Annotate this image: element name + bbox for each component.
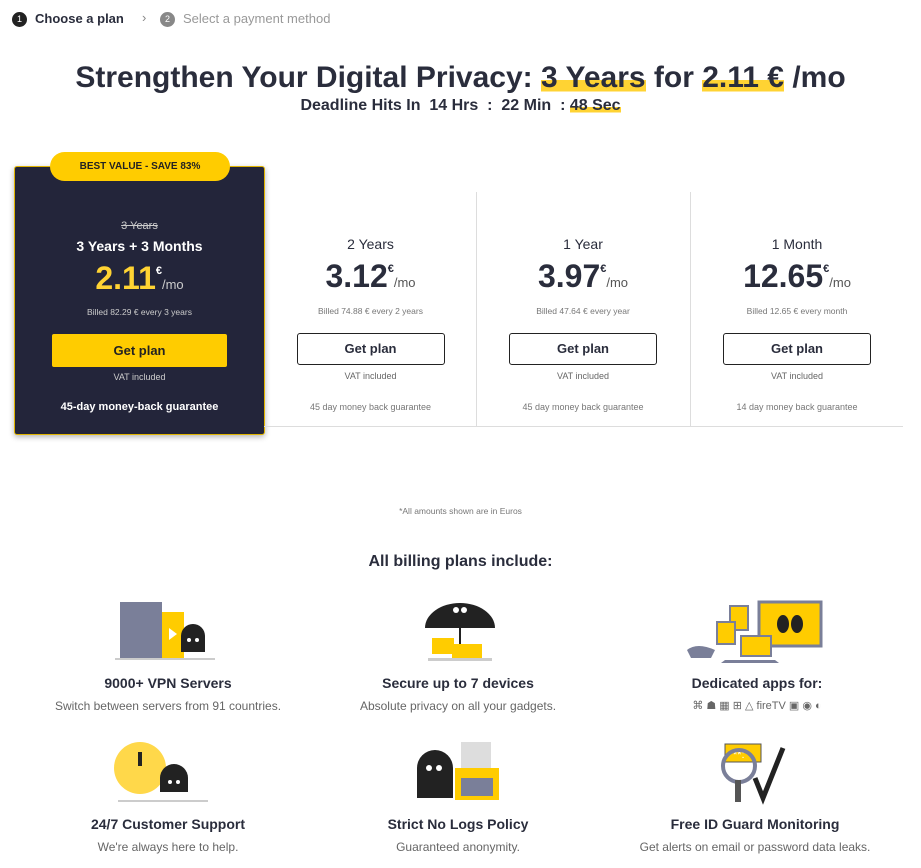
feature: no logs [388, 816, 528, 854]
icon: umbrella devices [425, 603, 495, 661]
plan: 1 month: Get plan [771, 341, 823, 356]
feature: support [91, 816, 245, 854]
badge: BEST VALUE - SAVE 83% [80, 161, 200, 172]
plan: 1 year: 45 day money back guarantee [522, 402, 644, 412]
breadcrumb: Choose a plan [35, 11, 124, 26]
badge [50, 152, 230, 181]
plan: 2 years: Get plan [344, 341, 396, 356]
feature: servers: 9000+ VPN Servers [104, 675, 232, 691]
breadcrumb: › [142, 10, 146, 25]
breadcrumb: 2 [165, 14, 170, 24]
plan: 1 year: 3.97€ /mo [538, 258, 628, 294]
feature: support: 24/7 Customer Support [91, 816, 245, 832]
feature: id guard: Get alerts on email or password data leaks. [640, 840, 870, 854]
feature: support: We're always here to help. [98, 840, 238, 854]
feature: devices: Secure up to 7 devices [382, 675, 534, 691]
breadcrumb: Select a payment method [183, 11, 330, 26]
plan: 1 year: Billed 47.64 € every year [536, 306, 630, 316]
plan: 1 month: 1 Month [772, 236, 822, 252]
icon: support [114, 742, 208, 802]
icon: id guard [721, 744, 786, 805]
feature: id guard: Free ID Guard Monitoring [671, 816, 839, 832]
section heading: All billing plans include: [368, 553, 552, 570]
plan: 1 month [690, 192, 903, 426]
title: Strengthen Your Digital Privacy: 3 Years for 2.11 € /mo [75, 61, 846, 94]
featured plan card: Billed 82.29 € every 3 years [87, 307, 192, 317]
breadcrumb: 1 [17, 14, 22, 24]
feature: no logs: Guaranteed anonymity. [396, 840, 520, 854]
featured plan card: 3 Years + 3 Months [76, 238, 203, 254]
plan: 1 month: VAT included [771, 371, 823, 381]
featured plan card: 2.11€ /mo [95, 260, 184, 296]
icon: apps devices [687, 600, 822, 663]
plan: 2 years: 45 day money back guarantee [310, 402, 431, 412]
feature: servers [55, 675, 281, 713]
featured plan card: 3 Years [121, 220, 158, 232]
featured plan card [14, 166, 265, 435]
plan: 2 years: VAT included [344, 371, 397, 381]
icon: no logs [417, 742, 499, 800]
plan: 1 month: Billed 12.65 € every month [747, 306, 847, 316]
plan: 1 month: 12.65€ /mo [743, 258, 851, 294]
plan: 1 year: VAT included [557, 371, 609, 381]
feature: no logs: Strict No Logs Policy [388, 816, 528, 832]
plan: 1 month: 14 day money back guarantee [736, 402, 858, 412]
feature: devices [360, 675, 556, 713]
plan: 2 years: 2 Years [347, 236, 394, 252]
feature: apps: ⌘ ☗ ▦ ⊞ △ fireTV ▣ ◉ ◐ [692, 700, 822, 712]
feature: apps [692, 675, 822, 712]
plan: 2 years: Billed 74.88 € every 2 years [318, 306, 423, 316]
icon: servers [115, 602, 215, 660]
icon: id guard: **: [733, 749, 745, 761]
plan: 1 year: 1 Year [563, 236, 603, 252]
footnote: *All amounts shown are in Euros [399, 506, 522, 516]
breadcrumb [12, 10, 330, 27]
plan: 1 year [476, 192, 689, 426]
feature: id guard [640, 816, 870, 854]
feature: apps: Dedicated apps for: [692, 675, 822, 691]
plan: 2 years: 3.12€ /mo [325, 258, 416, 294]
featured plan card: Get plan [113, 343, 166, 358]
featured plan card: 45-day money-back guarantee [61, 401, 218, 413]
feature: servers: Switch between servers from 91 countries. [55, 699, 281, 713]
plan: 2 years [297, 236, 445, 412]
countdown: Deadline Hits In 14 Hrs : 22 Min : 48 Sec [300, 97, 621, 114]
plan: 1 year: Get plan [557, 341, 609, 356]
featured plan card: VAT included [113, 372, 166, 382]
feature: devices: Absolute privacy on all your gadgets. [360, 699, 556, 713]
